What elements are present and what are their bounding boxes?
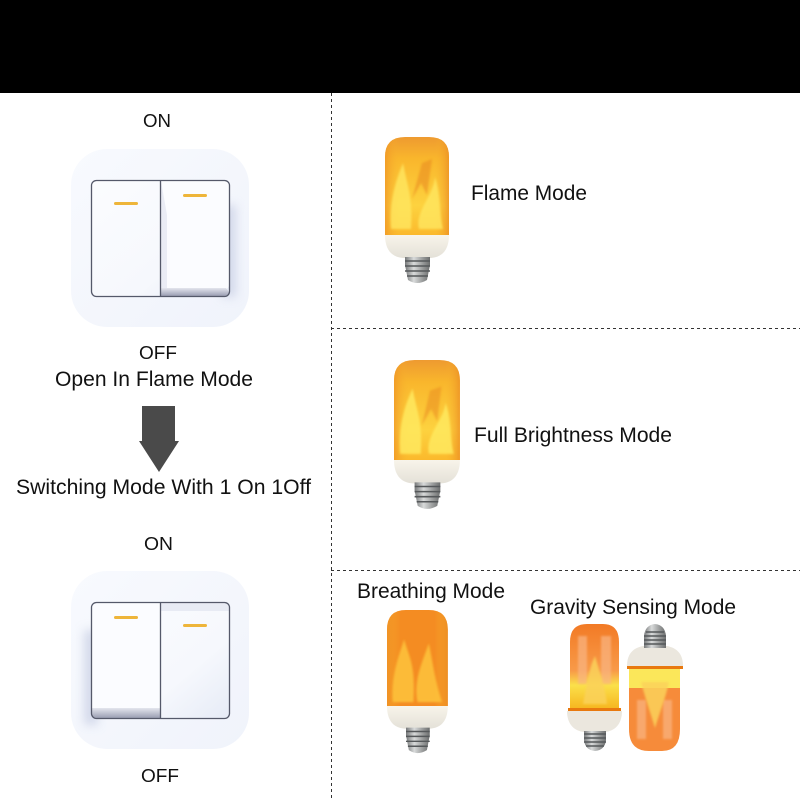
text: open in flame mode: Open In Flame Mode bbox=[55, 368, 253, 391]
black header band bbox=[0, 0, 800, 93]
panel: breathing mode bulb bbox=[387, 610, 448, 753]
arrow: down bbox=[139, 406, 179, 472]
panel: flame mode bulb bbox=[385, 137, 449, 283]
icon: top wall switch, right key raised bbox=[71, 149, 249, 327]
label: OFF bottom: OFF bbox=[141, 766, 179, 786]
bulb: upright bbox=[567, 624, 622, 751]
label: OFF top: OFF bbox=[139, 343, 177, 363]
bulb: inverted bbox=[627, 624, 683, 751]
icon: bottom wall switch, left key raised bbox=[71, 571, 249, 749]
text: gravity sensing mode: Gravity Sensing Mode bbox=[530, 596, 736, 619]
label: ON top: ON bbox=[143, 111, 171, 131]
panel: full brightness bulb bbox=[394, 360, 460, 509]
text: full brightness mode: Full Brightness Mode bbox=[474, 424, 672, 447]
label: ON bottom: ON bbox=[144, 534, 173, 554]
panel: gravity sensing bulbs bbox=[567, 624, 683, 751]
text: breathing mode: Breathing Mode bbox=[357, 580, 505, 603]
text: switching mode: Switching Mode With 1 On 1Off bbox=[16, 476, 311, 499]
text: flame mode: Flame Mode bbox=[471, 182, 587, 205]
